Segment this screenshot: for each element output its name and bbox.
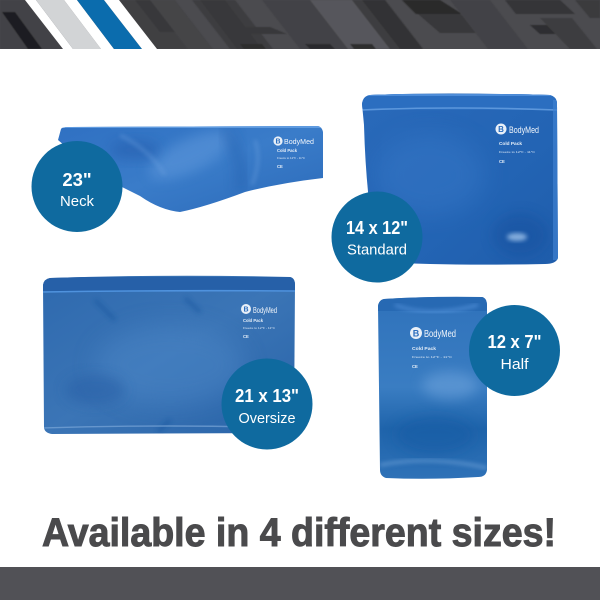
footer bar (0, 567, 600, 600)
logo: CE (499, 159, 505, 164)
badge: oversize: 21 x 13" (235, 385, 299, 406)
badge: half: 12 x 7" (488, 331, 542, 352)
logo (273, 136, 314, 169)
logo: BodyMed (253, 306, 277, 315)
logo: Freeze to 12°F - 11°C (243, 326, 276, 330)
logo: B (275, 138, 281, 146)
logo: Freeze to 12°F - 11°C (277, 156, 306, 160)
cold pack: half (375, 294, 490, 481)
cold pack: neck (55, 121, 325, 214)
logo: B (498, 125, 504, 134)
logo: B (413, 328, 420, 338)
white stripe 3 (104, 0, 157, 49)
blue stripe (77, 0, 142, 49)
angular header pattern (0, 0, 600, 49)
logo: Cold Pack (412, 346, 437, 351)
cold pack: standard (360, 92, 560, 267)
badge: standard (332, 192, 422, 282)
white stripe 1 (25, 0, 73, 49)
logo: CE (277, 164, 283, 169)
logo: CE (243, 334, 249, 339)
grey stripe (36, 0, 101, 49)
logo: BodyMed (424, 329, 456, 340)
logo: BodyMed (284, 139, 314, 146)
logo: Cold Pack (499, 141, 523, 146)
badge: standard: Standard (347, 242, 407, 258)
badge: half: Half (500, 356, 529, 373)
logo: B (243, 306, 249, 314)
header banner (0, 0, 600, 49)
badge: standard: 14 x 12" (346, 217, 408, 238)
white stripe 2 (64, 0, 114, 49)
badge: neck (32, 141, 122, 232)
logo: Freeze to 12°F - 11°C (412, 355, 453, 359)
badge: half (469, 305, 560, 396)
logo: Cold Pack (277, 148, 298, 153)
headline: Available in 4 different sizes! (42, 511, 556, 555)
logo (410, 327, 456, 369)
logo (496, 124, 539, 164)
logo: CE (412, 364, 418, 369)
logo: BodyMed (509, 125, 539, 135)
logo: Freeze to 12°F - 11°C (499, 150, 536, 154)
badge: oversize: Oversize (238, 410, 296, 427)
badge: neck: 23" (62, 169, 92, 190)
logo (241, 304, 277, 339)
badge: oversize (222, 358, 312, 450)
badge: neck: Neck (60, 193, 94, 210)
cold pack: oversize (40, 274, 298, 436)
logo: Cold Pack (243, 318, 264, 323)
